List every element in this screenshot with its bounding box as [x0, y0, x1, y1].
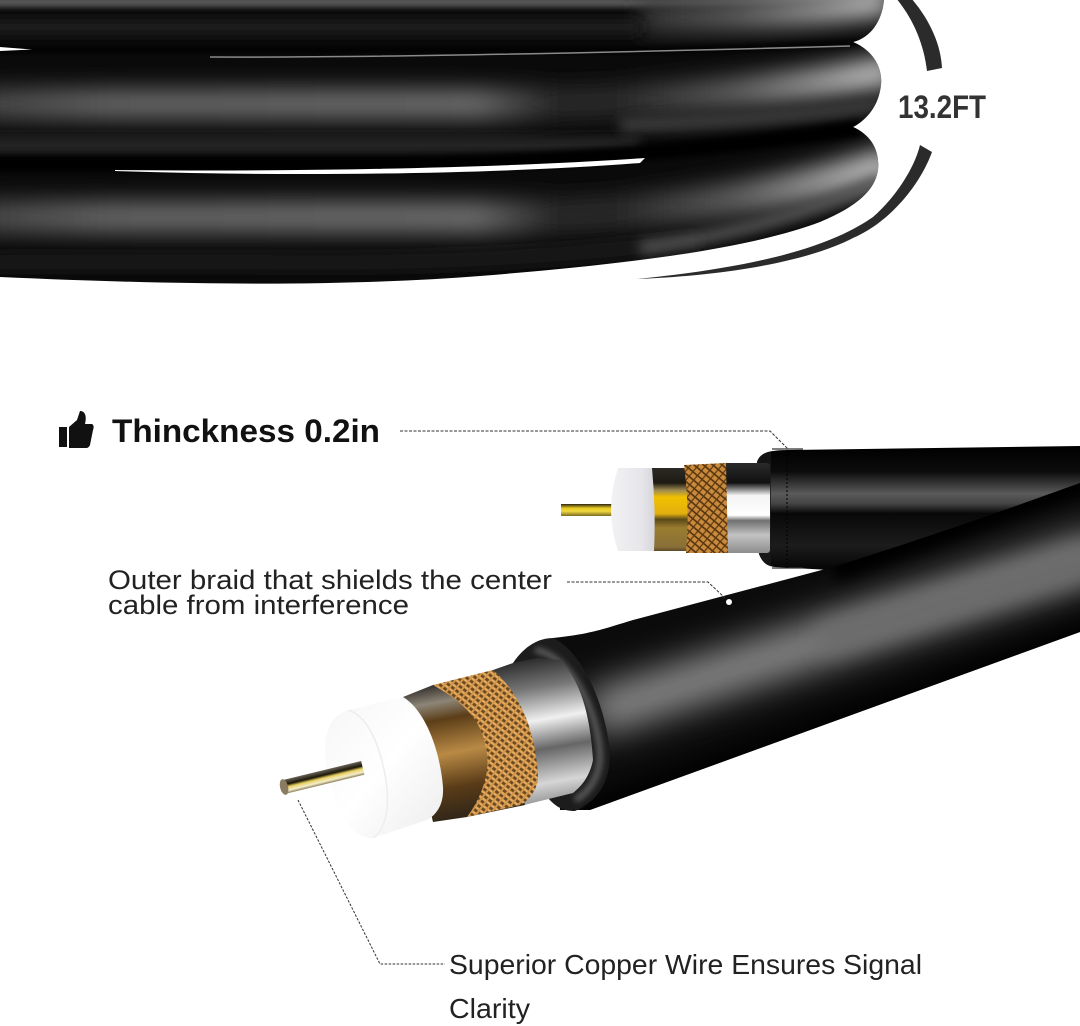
callout dot	[726, 599, 732, 605]
large cable gold layer	[403, 672, 525, 822]
label: copper wire: Clarity	[449, 993, 530, 1024]
label: copper wire: Superior Copper Wire Ensures Signal	[449, 949, 922, 980]
small upper cable	[561, 446, 1080, 570]
large cable silver foil	[493, 658, 593, 806]
label: outer braid: Outer braid that shields the center	[108, 565, 552, 595]
callout line: outer braid	[567, 582, 725, 598]
upper cable pin	[561, 504, 614, 516]
upper cable silver foil	[722, 463, 770, 553]
upper cable dimension marks	[772, 449, 803, 568]
large cable jacket end ring	[513, 638, 610, 811]
upper cable braid	[684, 463, 728, 553]
large cable white insulator	[325, 697, 443, 838]
large cable braid	[433, 670, 538, 817]
large cable pin	[278, 760, 365, 796]
upper cable white insulator	[611, 468, 655, 551]
upper cable jacket	[757, 446, 1080, 570]
large cable jacket	[553, 483, 1080, 810]
heading: thickness: Thinckness 0.2in	[112, 413, 380, 449]
coiled black cable	[0, 0, 884, 284]
icon: thumbs up	[59, 411, 94, 448]
insulator face shading	[348, 710, 387, 838]
large lower cable	[278, 470, 1080, 838]
ring highlight	[535, 650, 600, 800]
callout line: thickness	[400, 431, 788, 449]
length label: 13.2FT	[898, 89, 986, 125]
callout line: copper wire	[298, 800, 445, 964]
upper cable gold layer	[652, 468, 692, 551]
length arc bottom	[637, 145, 932, 279]
label: outer braid: cable from interference	[108, 590, 409, 620]
length arc top	[896, 0, 942, 71]
